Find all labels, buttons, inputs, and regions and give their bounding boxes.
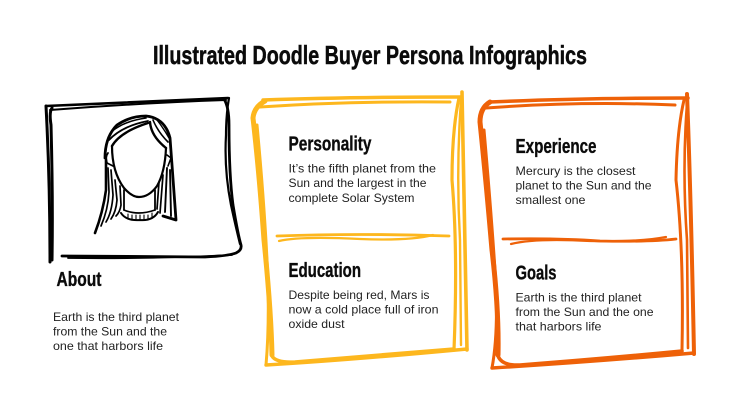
orange doodle frame — [480, 94, 694, 368]
text: goals body: Earth is the third planet — [516, 290, 642, 304]
text: experience body — [516, 164, 652, 207]
text: goals body: that harbors life — [516, 320, 602, 334]
text: goals body — [516, 290, 654, 334]
text: about body: Earth is the third planet — [53, 310, 180, 324]
neck — [123, 190, 125, 210]
text: personality body: Sun and the largest in the — [288, 176, 427, 190]
text: personality body: It’s the fifth planet from the — [288, 162, 436, 176]
text: education body: now a cold place full of iron — [288, 302, 438, 316]
heading: education: Education — [288, 260, 361, 282]
heading: experience: Experience — [516, 136, 596, 158]
ear left and right — [106, 153, 113, 166]
hair outline — [105, 116, 176, 220]
yellow divider — [277, 234, 449, 241]
text: experience body: smallest one — [516, 193, 586, 207]
icon: woman portrait — [95, 116, 176, 233]
text: experience body: Mercury is the closest — [516, 164, 636, 178]
text: goals body: from the Sun and the one — [516, 305, 654, 319]
panel: experience and goals — [480, 94, 694, 368]
text: experience body: planet to the Sun and the — [516, 178, 652, 192]
text: education body — [288, 288, 438, 331]
heading: goals: Goals — [516, 262, 556, 284]
yellow doodle frame — [253, 92, 467, 365]
collar — [121, 212, 158, 220]
heading: personality: Personality — [288, 134, 372, 156]
text: personality body: complete Solar System — [288, 191, 414, 205]
hair strands right — [165, 168, 167, 212]
title: Illustrated Doodle Buyer Persona Infographics — [153, 40, 587, 70]
heading: about: About — [56, 269, 102, 291]
text: education body: oxide dust — [288, 317, 345, 331]
hair strands top — [112, 123, 148, 146]
black doodle frame — [46, 98, 241, 262]
orange divider — [503, 237, 676, 244]
text: about body: from the Sun and the — [53, 324, 167, 338]
panel: personality and education — [253, 92, 467, 365]
text: personality body — [288, 162, 436, 205]
text: about body: one that harbors life — [53, 339, 163, 353]
text: education body: Despite being red, Mars is — [288, 288, 430, 302]
panel: about — [46, 98, 241, 353]
face — [112, 146, 166, 197]
text: about body — [53, 310, 180, 353]
hair strands left — [101, 168, 109, 226]
